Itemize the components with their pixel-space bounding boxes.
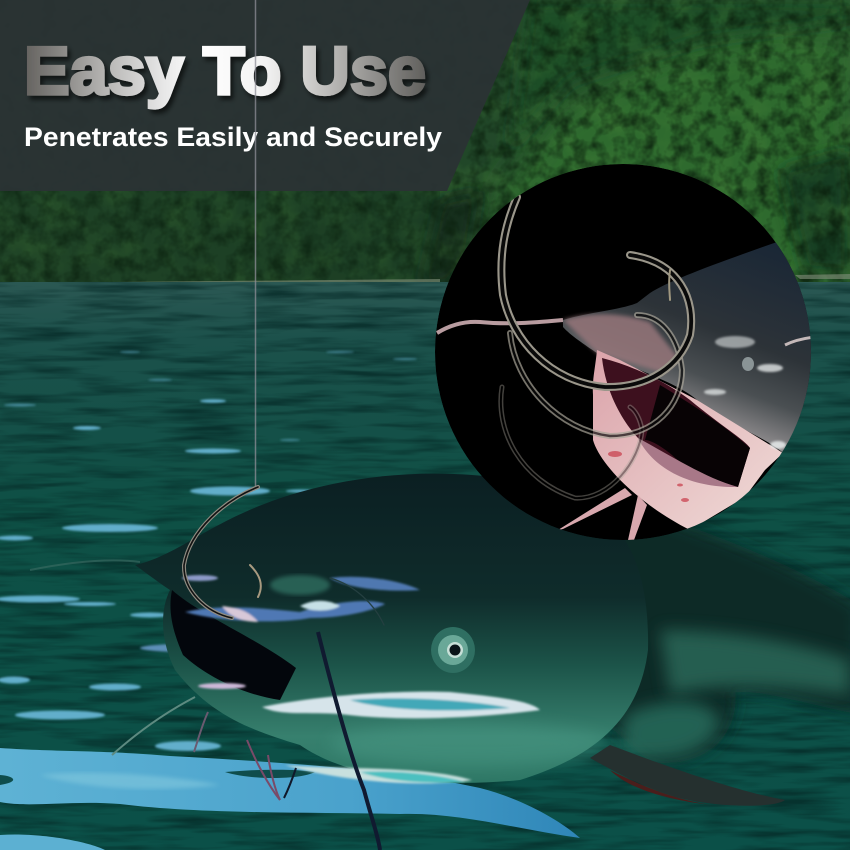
circle catfish right barbel <box>785 337 815 345</box>
fish speckle highlight <box>270 575 330 595</box>
fish rear glow <box>660 630 850 695</box>
magnifier circle <box>435 164 815 540</box>
dark upper slope <box>510 0 850 150</box>
circle catfish mouth interior <box>602 358 750 487</box>
ghost hook lower <box>501 387 642 498</box>
circle catfish head tint <box>563 314 680 373</box>
jaw red marks <box>608 451 689 502</box>
banner panel <box>0 0 530 191</box>
title: Easy To Use <box>24 33 426 109</box>
ghost hook middle <box>510 315 682 436</box>
large blue reflection <box>0 748 580 850</box>
left forest shade <box>0 188 440 285</box>
dark valley <box>420 190 480 285</box>
main close-up hook <box>501 197 691 387</box>
fish belly glow <box>330 723 610 767</box>
fish long barbel <box>318 632 380 850</box>
circle lower barbels <box>558 488 647 540</box>
fish eye <box>431 627 475 673</box>
fish ventral fin <box>590 745 785 806</box>
forest background <box>0 0 850 290</box>
dark right slope <box>780 150 850 275</box>
subtitle: Penetrates Easily and Securely <box>24 122 442 152</box>
catfish in water <box>30 474 850 850</box>
circle catfish lower jaw <box>593 350 783 530</box>
fish left whisker <box>30 560 140 570</box>
fish pectoral bulge <box>620 702 720 758</box>
reflections on fish <box>182 575 540 784</box>
main hook on line <box>184 487 384 625</box>
fish mouth <box>170 590 296 700</box>
water <box>0 282 850 850</box>
fishing line <box>254 0 256 488</box>
water reflections <box>0 351 417 751</box>
shoreline <box>0 274 850 286</box>
circle catfish eye <box>742 357 754 371</box>
fish body <box>135 474 648 783</box>
fish rear body <box>560 490 850 763</box>
bright hillside <box>470 30 850 290</box>
fish lower barbels <box>112 697 296 800</box>
circle barbel <box>437 320 563 333</box>
circle catfish highlights <box>704 336 786 449</box>
circle catfish upper body <box>563 242 815 453</box>
